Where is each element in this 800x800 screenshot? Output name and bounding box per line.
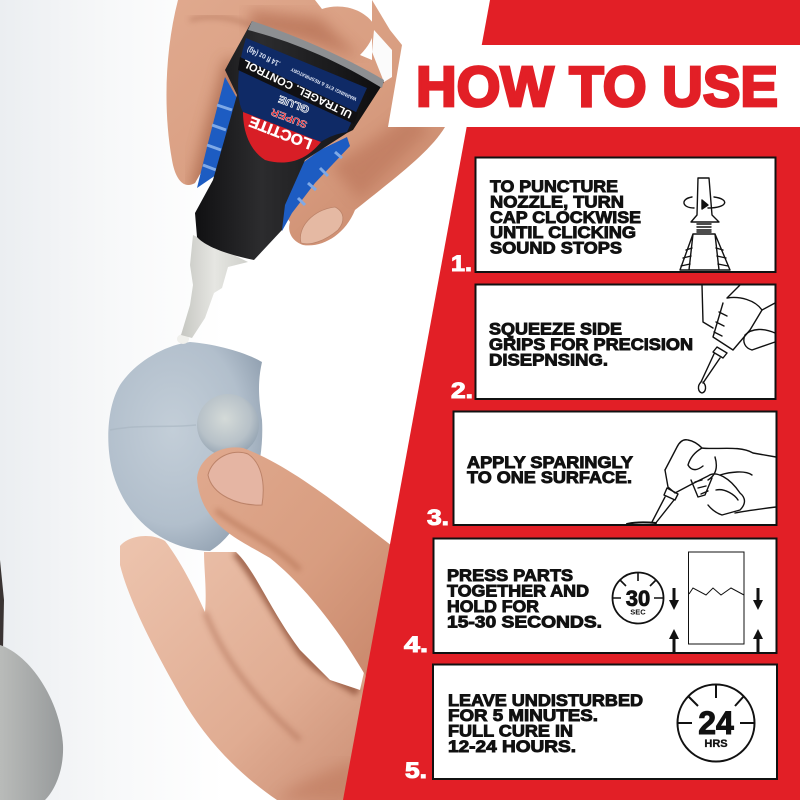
number: 5. — [405, 758, 427, 783]
instructions: HOLD FOR — [447, 598, 539, 616]
instructions: 15-30 SECONDS. — [447, 614, 602, 632]
ball bump — [197, 394, 259, 456]
photo background — [0, 0, 500, 800]
icon: squeezing hand — [698, 285, 775, 393]
nozzle — [181, 235, 248, 338]
instructions: DISEPNSING. — [489, 352, 608, 370]
step 4 — [404, 538, 776, 657]
blue side grips — [197, 77, 238, 188]
box — [454, 412, 776, 525]
number: 4. — [404, 632, 428, 657]
bottle: WARNING! EYE & RESPIRATORY — [290, 66, 358, 102]
instructions: FULL CURE IN — [448, 722, 573, 740]
number: 2. — [451, 378, 473, 403]
instructions — [489, 320, 693, 370]
number: 1. — [451, 251, 472, 276]
instructions: LEAVE UNDISTURBED — [448, 692, 643, 710]
bottle: .14 fl oz (4g) — [245, 45, 282, 68]
instructions: TO PUNCTURE — [490, 178, 618, 196]
bottle — [195, 21, 384, 260]
instructions — [490, 178, 641, 258]
instructions: PRESS PARTS — [447, 567, 573, 585]
navy label — [238, 38, 367, 142]
bottle: LOCTITE — [247, 113, 314, 152]
icon: 24 hour clock: HRS — [704, 738, 728, 750]
thumbnail — [208, 452, 263, 505]
instructions: GRIPS FOR PRECISION — [489, 336, 693, 354]
silver cap — [248, 21, 384, 88]
product text: ULTRAGEL. CONTROL — [241, 57, 354, 120]
box — [433, 664, 777, 779]
kettlebell object — [0, 560, 63, 800]
instructions: FOR 5 MINUTES. — [448, 707, 598, 725]
step 3 — [427, 412, 776, 530]
box — [434, 538, 776, 653]
glued grey ball — [108, 342, 262, 551]
gap between finger and wrist — [372, 30, 392, 82]
instructions: SQUEEZE SIDE — [489, 320, 622, 338]
title: HOW TO USE — [416, 55, 778, 119]
instructions — [448, 692, 643, 756]
instructions — [447, 567, 602, 632]
instructions: SOUND STOPS — [490, 240, 622, 258]
thumb — [197, 447, 392, 680]
icon: press arrows and parts — [669, 552, 763, 652]
instructions: TOGETHER AND — [447, 582, 589, 600]
title banner — [388, 45, 800, 127]
box — [476, 284, 776, 399]
red logo arc — [243, 112, 321, 163]
step 1 — [451, 158, 776, 276]
instructions: APPLY SPARINGLY — [467, 454, 633, 472]
icon: hand applying glue — [627, 440, 776, 524]
number: 3. — [427, 505, 449, 530]
bottle: GLUE — [277, 93, 311, 114]
glue drop — [177, 334, 189, 344]
icon: 30 sec timer: SEC — [630, 608, 646, 616]
icon: 30 sec timer: 30 — [626, 586, 650, 611]
instructions: 12-24 HOURS. — [448, 738, 576, 756]
lower hand — [120, 447, 392, 800]
icon: 30 sec timer — [612, 572, 664, 624]
icon: nozzle cap — [680, 178, 730, 270]
bottle: SUPER — [269, 105, 309, 129]
instructions: TO ONE SURFACE. — [467, 469, 632, 487]
black body — [195, 21, 384, 260]
upper hand — [166, 0, 445, 245]
step 5 — [405, 664, 777, 783]
thumbnail — [300, 207, 343, 244]
red panel — [343, 0, 800, 800]
step 2 — [451, 284, 776, 403]
instructions: UNTIL CLICKING — [490, 224, 636, 242]
icon: 24 hour clock — [678, 684, 754, 762]
box — [476, 158, 776, 272]
icon: 24 hour clock: 24 — [698, 705, 734, 741]
instructions: CAP CLOCKWISE — [490, 209, 641, 227]
instructions: NOZZLE, TURN — [490, 194, 624, 212]
black band on label — [238, 57, 358, 124]
instructions — [467, 454, 633, 487]
